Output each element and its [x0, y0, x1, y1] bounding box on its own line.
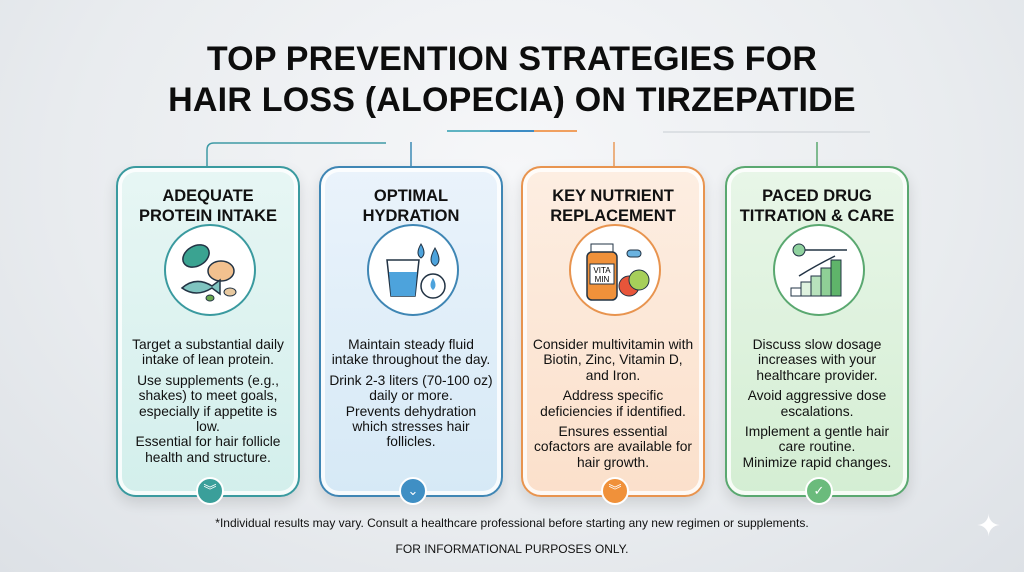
text: protein: Essential for hair follicle health and structure.: [136, 434, 280, 465]
text: titration: Avoid aggressive dose escalations.: [748, 388, 886, 419]
text: protein: Target a substantial daily intake of lean protein.: [132, 337, 284, 367]
badge: [805, 477, 833, 505]
panel: hydration: [319, 166, 503, 497]
text: hydration: Prevents dehydration which stresses hair follicles.: [346, 404, 476, 449]
icon: vitamin bottle: MIN: [595, 275, 610, 284]
panel: hydration: OPTIMAL: [374, 187, 448, 205]
badge: [601, 477, 629, 505]
text: protein: [132, 337, 284, 465]
badge: ︾: [203, 483, 216, 498]
badge: ⌄: [408, 483, 418, 498]
text: hydration: [329, 337, 493, 449]
icon: vitamin bottle: VITA: [593, 266, 611, 275]
icon: water glass: [367, 224, 459, 316]
panel: titration: TITRATION & CARE: [740, 207, 894, 225]
text: protein: Use supplements (e.g., shakes) to meet goals, especially if appetite is low.: [137, 373, 279, 434]
panel: titration: PACED DRUG: [762, 187, 872, 205]
panel: nutrients: [521, 166, 705, 497]
icon: vitamin bottle: [569, 224, 661, 316]
title: HAIR LOSS (ALOPECIA) ON TIRZEPATIDE: [168, 81, 856, 119]
icon: protein foods: [164, 224, 256, 316]
panel: nutrients: KEY NUTRIENT: [552, 187, 674, 205]
footnote: *Individual results may vary. Consult a healthcare professional before starting any new regimen or supplements.: [215, 516, 809, 530]
text: hydration: Drink 2-3 liters (70-100 oz) daily or more.: [329, 373, 493, 403]
panel: protein: PROTEIN INTAKE: [139, 207, 277, 225]
badge: ︾: [608, 483, 622, 498]
text: hydration: Maintain steady fluid intake throughout the day.: [332, 337, 490, 367]
badge: [399, 477, 427, 505]
badge: [196, 477, 224, 505]
title: [168, 40, 856, 119]
text: nutrients: Ensures essential cofactors are available for hair growth.: [534, 424, 692, 470]
disclaimer: FOR INFORMATIONAL PURPOSES ONLY.: [396, 542, 628, 556]
text: nutrients: Consider multivitamin with Biotin, Zinc, Vitamin D, and Iron.: [533, 337, 693, 383]
title: TOP PREVENTION STRATEGIES FOR: [207, 40, 817, 78]
text: nutrients: [533, 337, 693, 470]
icon: sparkle: ✦: [976, 510, 1001, 543]
text: titration: Discuss slow dosage increases with your healthcare provider.: [753, 337, 881, 383]
icon: step chart: [773, 224, 865, 316]
panel: protein: ADEQUATE: [162, 187, 254, 205]
panel: protein: [116, 166, 300, 497]
text: titration: Minimize rapid changes.: [743, 455, 891, 470]
panel: hydration: HYDRATION: [363, 207, 459, 225]
text: titration: Implement a gentle hair care routine.: [745, 424, 889, 454]
text: titration: [743, 337, 891, 470]
badge: ✓: [814, 483, 824, 498]
panel: titration: [725, 166, 909, 497]
text: nutrients: Address specific deficiencies if identified.: [540, 388, 686, 419]
panel: nutrients: REPLACEMENT: [550, 207, 676, 225]
